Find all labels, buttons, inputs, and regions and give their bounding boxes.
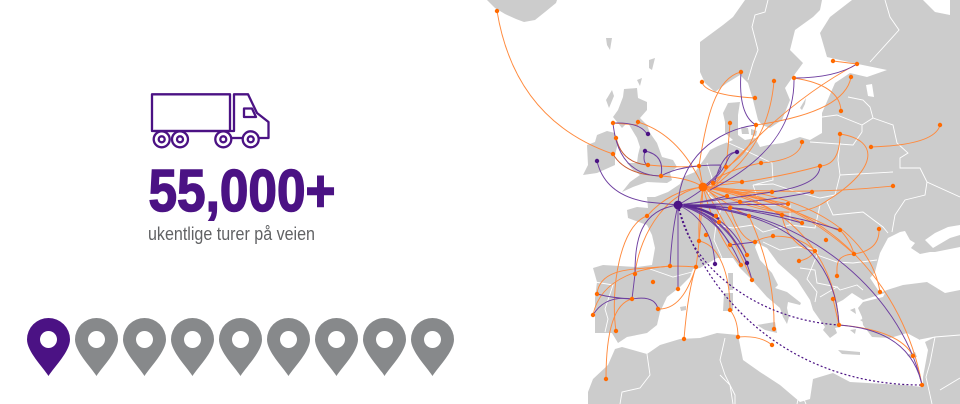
pin: active: [27, 318, 70, 376]
purple route points: [595, 132, 749, 266]
Corsica and Sardinia: [723, 273, 733, 311]
Ireland: [583, 131, 618, 175]
Great Britain: [613, 88, 677, 192]
pin: inactive group: [75, 318, 454, 376]
Sicily: [757, 322, 777, 333]
icon: truck: [152, 94, 268, 147]
purple routes: [593, 64, 922, 385]
Gotland: [800, 98, 806, 110]
dense purple fan near hub: [684, 205, 719, 219]
Balearic Islands: [680, 306, 686, 311]
headline number: 55,000+: [148, 158, 336, 224]
lake Peipus: [866, 84, 874, 97]
sea: Azov: [925, 225, 960, 248]
sea: Black Sea: [870, 231, 960, 293]
dotted routes: [678, 205, 922, 385]
country borders: [595, 0, 960, 404]
Crete: [838, 350, 860, 355]
subtitle: ukentlige turer på veien: [148, 224, 315, 244]
Danish islands: [741, 127, 757, 136]
sea: White Sea: [923, 0, 950, 15]
orange routes: [497, 11, 940, 385]
Cyprus: [907, 352, 917, 358]
Iceland: [487, 0, 557, 22]
Shetland, Orkney, Hebrides: [606, 38, 655, 108]
land and seas: [480, 0, 960, 404]
Aegean islands: [850, 308, 866, 334]
location pins row: [27, 318, 454, 376]
orange hub: [699, 183, 707, 191]
orange route points: [495, 9, 942, 387]
map of Europe with routes: [480, 0, 960, 404]
purple hub: [674, 201, 682, 209]
